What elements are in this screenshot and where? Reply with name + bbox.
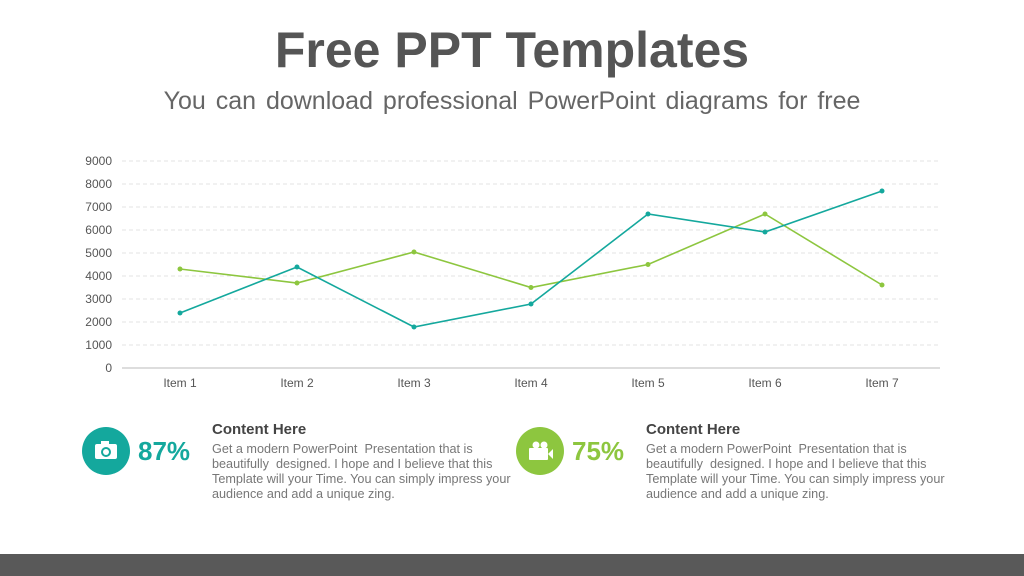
line chart: 8000 — [85, 177, 112, 191]
footer bar — [0, 554, 1024, 576]
line chart: 4000 — [85, 269, 112, 283]
series: green — [178, 212, 884, 290]
line chart — [85, 154, 940, 390]
line chart: 5000 — [85, 246, 112, 260]
line chart: 7000 — [85, 200, 112, 214]
stat: 87%: 87% — [138, 436, 190, 466]
subtitle: You can download professional PowerPoint diagrams for free — [164, 87, 860, 115]
series: teal — [178, 188, 884, 330]
line chart: Item 3 — [397, 376, 431, 390]
line chart: 2000 — [85, 315, 112, 329]
title: Free PPT Templates — [275, 22, 749, 78]
line chart: 1000 — [85, 338, 112, 352]
line chart: Item 2 — [280, 376, 314, 390]
line chart: 3000 — [85, 292, 112, 306]
text block 2: Content Here — [646, 421, 740, 438]
icon: camera — [82, 427, 130, 475]
line chart: 6000 — [85, 223, 112, 237]
line chart: 0 — [105, 361, 112, 375]
stat: 75%: 75% — [572, 436, 624, 466]
line chart: Item 7 — [865, 376, 899, 390]
text block 1: Get a modern PowerPoint Presentation that is beautifully designed. I hope and I believe that this Template will your Time. You can simply impress your audience and add a unique zing. — [212, 442, 511, 501]
text block 1: Content Here — [212, 421, 306, 438]
line chart: Item 5 — [631, 376, 665, 390]
line chart: Item 4 — [514, 376, 548, 390]
text block 2: Get a modern PowerPoint Presentation that is beautifully designed. I hope and I believe that this Template will your Time. You can simply impress your audience and add a unique zing. — [646, 442, 945, 501]
line chart: 9000 — [85, 154, 112, 168]
icon: video camera — [516, 427, 564, 475]
line chart: Item 6 — [748, 376, 782, 390]
line chart: Item 1 — [163, 376, 197, 390]
